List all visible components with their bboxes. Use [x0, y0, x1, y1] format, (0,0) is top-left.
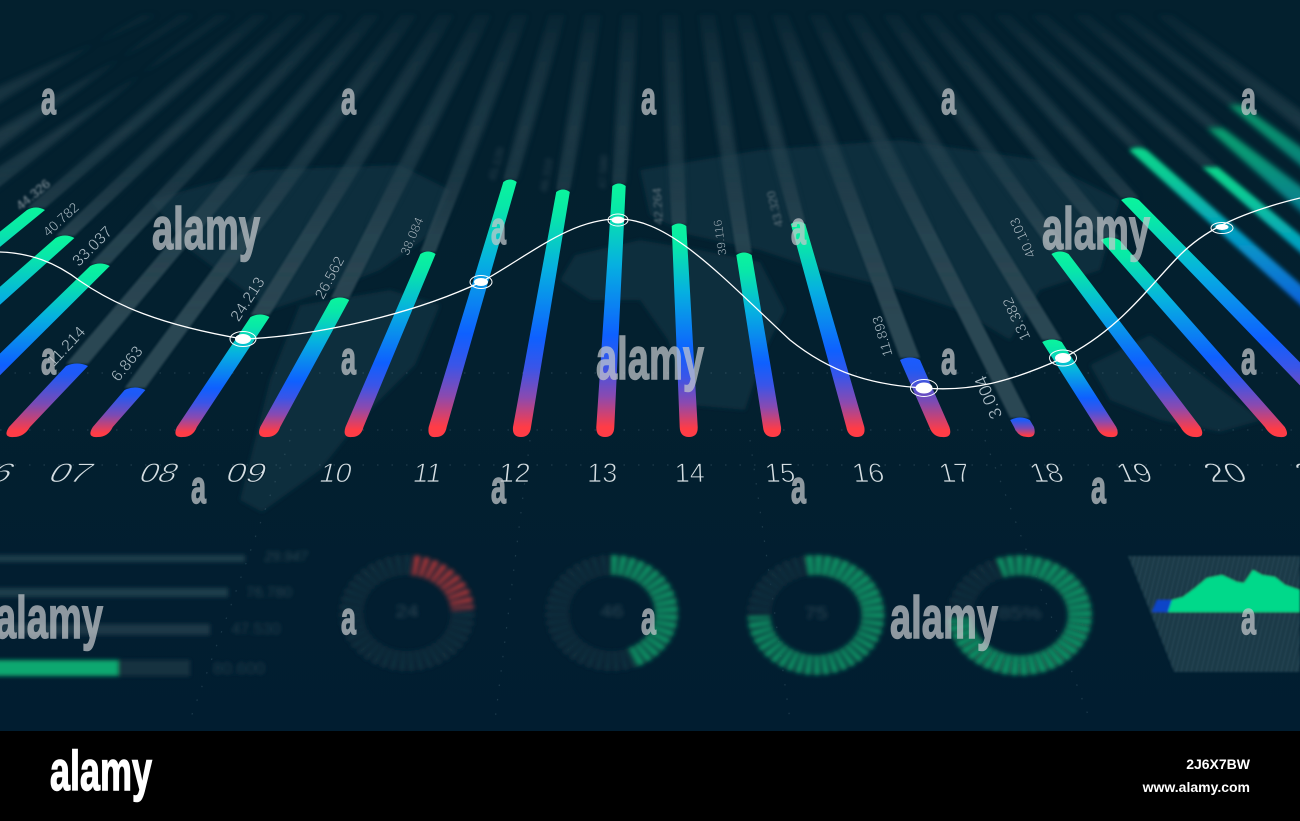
marker: [230, 332, 256, 346]
bar 20: [1042, 340, 1118, 437]
axis: 08: 08: [134, 458, 184, 488]
image id: 2J6X7BW: [1186, 756, 1251, 772]
watermark letters: a: [791, 461, 806, 513]
ring track: [557, 565, 667, 661]
watermark letters: a: [41, 72, 56, 124]
bar 13: [513, 190, 570, 437]
value: 6.863: 6.863: [108, 343, 147, 385]
axis: 14: 14: [674, 458, 705, 488]
value: 47.580: 47.580: [597, 155, 611, 189]
marker: [1211, 222, 1233, 234]
panel: ring gauge 85: [960, 565, 1080, 665]
axis: 18: 18: [1025, 458, 1068, 489]
watermark letters: a: [341, 72, 356, 124]
panel: horizontal progress bars: [0, 548, 309, 678]
value: 44.326: 44.326: [13, 176, 53, 213]
watermark letters: [41, 72, 1256, 644]
marker: [1050, 350, 1076, 366]
watermark letters: a: [341, 332, 356, 384]
ring track: [759, 565, 873, 665]
bar 17: [791, 222, 865, 437]
watermark word: alamy: [596, 326, 704, 392]
bar 15: [672, 224, 698, 437]
axis: 12: 12: [497, 458, 532, 488]
bar 06: [0, 264, 110, 433]
axis: 07: 07: [42, 458, 100, 488]
watermark word: alamy: [890, 585, 998, 651]
watermark letters: a: [1241, 72, 1256, 124]
value: 38.084: 38.084: [397, 215, 427, 257]
bar 04: [0, 208, 45, 433]
value: 26.562: 26.562: [312, 254, 348, 302]
bar right 1: [1121, 198, 1300, 433]
value: 3.004: 3.004: [970, 373, 1006, 422]
bar 05: [0, 236, 74, 433]
dotted grid: [0, 373, 1300, 720]
trend markers: [230, 214, 1233, 396]
panel: ring gauge 75: [759, 565, 873, 665]
panel: area chart: [1128, 556, 1300, 672]
progress bar 4 track: [0, 660, 190, 676]
value labels: [13, 146, 1039, 422]
progress value 2: 76.780: [246, 584, 292, 601]
watermark letters: a: [491, 202, 506, 254]
watermark letters: a: [1241, 332, 1256, 384]
panel: ring gauge 24: [351, 565, 463, 661]
panel: ring gauge 46: [557, 565, 667, 661]
watermark letters: a: [191, 461, 206, 513]
footer logo: alamy: [50, 739, 152, 802]
gray bar tracks: [0, 15, 1300, 418]
watermark letters: a: [641, 592, 656, 644]
footer bar: [0, 731, 1300, 821]
watermark letters: a: [641, 72, 656, 124]
value: 24.213: 24.213: [228, 274, 269, 325]
area chart background: [1128, 556, 1300, 672]
bar 08: [90, 388, 145, 437]
axis: 09: 09: [222, 458, 272, 488]
axis: 17: 17: [936, 457, 973, 488]
value: 13.382: 13.382: [1000, 295, 1034, 343]
bar 14: [596, 184, 626, 437]
axis: 20: 20: [1197, 458, 1254, 489]
value: 39.116: 39.116: [711, 219, 729, 256]
area chart green area: [1168, 570, 1300, 612]
marker: [608, 214, 628, 226]
bars: colored values: [0, 180, 1300, 437]
ring value: 75: [805, 604, 827, 624]
blurred distant bars, right: [1129, 105, 1300, 433]
watermark letters: a: [41, 332, 56, 384]
bar 09: [175, 314, 270, 437]
watermark letters: a: [1091, 461, 1106, 513]
axis: 19: 19: [1111, 458, 1158, 488]
progress value 4: 80.600: [213, 659, 265, 678]
value: 11.893: 11.893: [869, 314, 896, 359]
progress bar 1: [0, 555, 245, 562]
ring arc: [960, 565, 1080, 665]
value: 43.320: 43.320: [764, 189, 786, 228]
bar 11: [345, 252, 436, 437]
ring value: 24: [395, 601, 419, 622]
progress value 1: 29.947: [264, 548, 309, 564]
value: 40.782: 40.782: [39, 199, 82, 240]
value: 42.264: 42.264: [650, 187, 666, 225]
watermark letters: a: [941, 72, 956, 124]
ring arc: [414, 565, 462, 609]
bar 22: [1101, 238, 1287, 437]
bar 07: [6, 364, 88, 437]
progress bar 4 fill: [0, 660, 118, 676]
axis labels: [0, 457, 1300, 489]
axis: 11: 11: [411, 457, 444, 488]
watermark letters: a: [341, 592, 356, 644]
axis: 16: 16: [850, 458, 887, 488]
bar 12: [428, 180, 517, 437]
progress bar 3: [0, 624, 210, 635]
axis: 15: 15: [763, 457, 797, 488]
watermark word: alamy: [0, 585, 103, 651]
watermark: alamy repeated: [0, 72, 1256, 651]
marker: [470, 276, 492, 288]
ring track: [351, 565, 463, 661]
axis: 13: 13: [587, 458, 618, 488]
progress bar 2: [0, 588, 228, 597]
trend line: [0, 198, 1300, 389]
ring arc: [612, 565, 666, 658]
bar 10: [259, 298, 349, 437]
value: 46.310: 46.310: [538, 158, 556, 193]
bar 19: [1010, 418, 1035, 437]
ring track: [960, 565, 1080, 665]
value: 33.037: 33.037: [70, 223, 116, 270]
watermark word: alamy: [1042, 196, 1150, 262]
watermark letters: a: [791, 202, 806, 254]
bar 18: [900, 358, 950, 437]
world map: [150, 140, 1262, 512]
value: 11.214: 11.214: [44, 324, 89, 370]
ring arc: [759, 565, 873, 665]
value: 45.120: 45.120: [487, 146, 508, 182]
area chart blue segment: [1152, 600, 1178, 612]
website: www.alamy.com: [1142, 779, 1250, 795]
value: 40.103: 40.103: [1006, 215, 1039, 261]
ring value: 46: [601, 602, 623, 622]
progress value 3: 47.530: [232, 621, 281, 638]
watermark letters: a: [491, 461, 506, 513]
bar 16: [736, 252, 781, 437]
watermark letters: a: [1241, 592, 1256, 644]
bar 21: [1051, 252, 1202, 437]
marker: [910, 380, 938, 396]
axis: 10: 10: [317, 458, 356, 488]
watermark word: alamy: [152, 196, 260, 262]
watermark letters: a: [941, 332, 956, 384]
ring value: 85%: [998, 604, 1042, 624]
